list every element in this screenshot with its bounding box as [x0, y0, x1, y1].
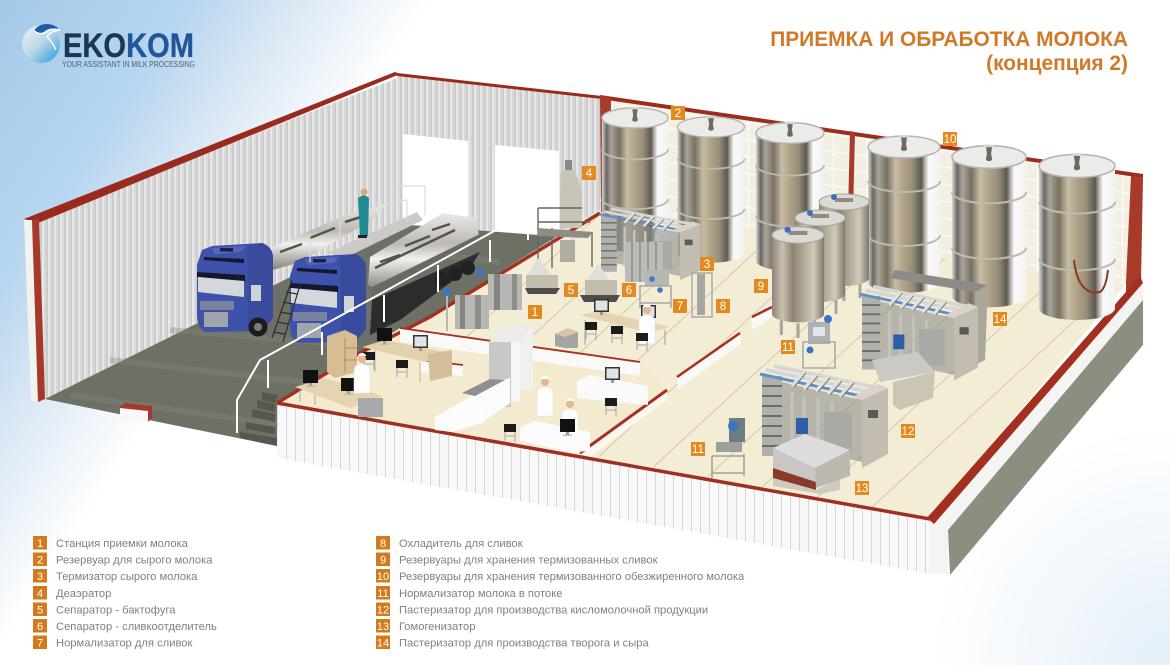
logo wordmark: EKOKOM: [63, 27, 194, 65]
tank 10a: [868, 135, 940, 293]
legend item 4: [33, 586, 111, 600]
legend item 8: Охладитель для сливок: [399, 538, 523, 550]
legend item 14: Пастеризатор для производства творога и сыра: [399, 638, 649, 650]
ladder: [272, 280, 300, 342]
legend item 6: 6: [37, 621, 43, 633]
stairs: [240, 392, 278, 446]
left wall red end: [32, 219, 45, 402]
marker 11 lower: 11: [692, 444, 704, 456]
logo: [22, 24, 195, 69]
tile wall, milk tanks zone: [602, 97, 1143, 285]
deaerator: [537, 160, 593, 268]
left corrugated wall: [38, 78, 397, 399]
raw milk thermizer: [599, 209, 701, 282]
milk receiving station: [443, 268, 522, 331]
red hose on tank: [1074, 260, 1108, 292]
red column left: [600, 96, 611, 212]
partition wall: office small: [420, 360, 463, 376]
normalizer 11 upper: [803, 315, 835, 368]
marker 13: 13: [856, 483, 868, 495]
homogenizer behind 14: [872, 352, 935, 410]
marker 5: [564, 283, 578, 297]
dock floor texture: [70, 250, 500, 425]
back wall red top: [600, 95, 1143, 178]
tank 9c: [772, 227, 824, 338]
partition wall: office back: [400, 328, 640, 376]
legend item 12: 12: [377, 604, 389, 616]
separator bactofuge: [525, 258, 560, 294]
marker 1: 1: [532, 307, 538, 319]
station unit b: [476, 268, 522, 310]
marker 6: 6: [626, 285, 632, 297]
white dock block: [120, 403, 152, 422]
cream chiller: [692, 273, 712, 317]
marker 5: 5: [568, 285, 574, 297]
marker 4: [582, 166, 596, 180]
legend item 2: Резервуар для сырого молока: [56, 554, 213, 566]
marker 11 upper: 11: [782, 342, 794, 354]
service platform: [327, 212, 423, 257]
homogenizer 13: [773, 434, 850, 494]
lab desk top: [580, 299, 670, 351]
legend item 10: Резервуары для хранения термизованного обезжиренного молока: [399, 571, 745, 583]
left wall white end: [24, 220, 38, 401]
legend item 11: Нормализатор молока в потоке: [399, 588, 562, 600]
logo tagline: YOUR ASSISTANT IN MILK PROCESSING: [62, 60, 195, 69]
position numbers on plan: [528, 106, 1007, 495]
legend left column: [33, 536, 217, 650]
station unit a: [443, 288, 489, 331]
marker 8: 8: [720, 301, 726, 313]
title: (концепция 2): [986, 52, 1128, 75]
right parapet red: [927, 276, 1143, 524]
back office desk: [577, 367, 648, 416]
legend item 5: Сепаратор - бактофуга: [56, 604, 176, 616]
marker 7: [673, 299, 687, 313]
platform handrail: [310, 186, 425, 262]
office: shelf: [327, 330, 357, 378]
legend item 12: Пастеризатор для производства кисломолочной продукции: [399, 604, 708, 616]
normalizer for cream: [639, 270, 672, 308]
marker 7: 7: [677, 301, 683, 313]
floor seams: [466, 212, 1116, 517]
right side concrete: [948, 300, 1143, 575]
icon: milk drop: [22, 24, 60, 63]
reception desk: [504, 419, 590, 453]
right wall red inner: [1126, 176, 1143, 300]
cab 2: [290, 254, 366, 343]
legend item 1: Станция приемки молока: [56, 538, 189, 550]
legend item 14: 14: [377, 638, 389, 650]
truck 1 with tanker: [197, 205, 385, 336]
legend item 11: 11: [377, 588, 389, 600]
front parapet red: [277, 403, 930, 519]
marker 8: [716, 299, 730, 313]
left wall red top edge: [24, 72, 400, 223]
legend item 5: 5: [37, 604, 43, 616]
marker 9: [754, 279, 768, 293]
marker 2: 2: [675, 108, 681, 120]
loading dock floor: [45, 224, 602, 446]
partition wall: long low wall: [677, 333, 741, 389]
legend item 10: 10: [377, 571, 389, 583]
pasteurizer 14: [860, 270, 988, 381]
office floor: [277, 328, 667, 453]
marker 2: [671, 106, 685, 120]
wheel 1: [248, 318, 268, 336]
tanker 2: [368, 213, 480, 299]
raw milk tanks: [602, 107, 824, 271]
legend item 13: 13: [377, 621, 389, 633]
legend item 1: 1: [37, 538, 43, 550]
title: [770, 28, 1128, 75]
legend item 3: 3: [37, 571, 43, 583]
back corrugated wall with gates: [397, 73, 602, 240]
legend item 4: 4: [37, 588, 43, 600]
thermizer plates: [625, 242, 663, 282]
lab staff: [537, 376, 578, 438]
tank 2b: [678, 116, 744, 263]
tank 10b: [952, 145, 1026, 307]
marker 12: 12: [902, 426, 914, 438]
legend item 6: Сепаратор - сливкоотделитель: [56, 621, 217, 633]
dock handrail: [237, 213, 528, 433]
lab counter: [435, 378, 510, 432]
normalizer 11 lower: [712, 418, 745, 478]
legend item 13: [376, 619, 475, 633]
marker 6: [622, 283, 636, 297]
drawer cube: [555, 328, 578, 348]
legend item 4: Деаэратор: [56, 588, 111, 600]
legend item 9: 9: [380, 554, 386, 566]
legend item 9: Резервуары для хранения термизованных сливок: [399, 554, 658, 566]
cab 1: [197, 243, 273, 332]
legend item 7: Нормализатор для сливок: [56, 638, 193, 650]
office: desk with drawers: [362, 328, 452, 382]
right side white band: [930, 282, 1143, 574]
office: front desk: [295, 353, 383, 417]
building: walls and floors: [24, 43, 1170, 575]
hall floor: [277, 208, 1125, 518]
front corrugated wall: [277, 405, 930, 574]
legend item 2: 2: [37, 554, 43, 566]
worker in teal: [358, 188, 369, 238]
fridge: [489, 324, 533, 407]
marker 10: 10: [944, 134, 956, 146]
tanker 1: [273, 205, 385, 270]
marker 14: 14: [994, 314, 1007, 326]
separator skimmer: [580, 264, 620, 302]
marker 1: [528, 305, 542, 319]
skim milk tanks: [868, 135, 1115, 320]
legend item 3: Термизатор сырого молока: [56, 571, 198, 583]
marker 3: [700, 257, 714, 271]
legend item 7: 7: [37, 638, 43, 650]
title: ПРИЕМКА И ОБРАБОТКА МОЛОКА: [770, 28, 1128, 51]
tank 10c: [1039, 153, 1115, 320]
legend right column: [376, 536, 745, 650]
dock/hall red parapet: [277, 213, 600, 403]
partition wall: short: [752, 307, 772, 330]
marker 9: 9: [758, 281, 764, 293]
marker 3: 3: [704, 259, 710, 271]
trailer chassis: [370, 252, 480, 335]
pasteurizer 12: [760, 366, 888, 468]
back wall top edge: [397, 73, 602, 99]
red column middle: [848, 131, 855, 215]
legend item 13: Гомогенизатор: [399, 621, 475, 633]
partition wall: hall divider: [580, 390, 667, 457]
tank 2c: [756, 122, 824, 271]
cream tanks: [772, 194, 869, 338]
tank 9a: [819, 194, 869, 301]
legend item 8: 8: [380, 538, 386, 550]
tank 9b: [795, 210, 845, 317]
tank 2a: [602, 107, 668, 252]
truck 2 with tanker: [290, 213, 480, 343]
marker 4: 4: [586, 168, 593, 180]
